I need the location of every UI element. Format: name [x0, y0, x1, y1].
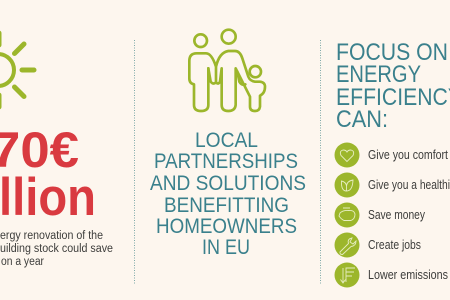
heading: local partnerships: HOMEOWNERS	[156, 215, 297, 238]
savings description: ergy renovation of the	[0, 230, 103, 242]
big unit: llion	[0, 168, 96, 227]
benefit: save money: Save money	[368, 208, 426, 222]
savings description	[0, 230, 113, 268]
heading: local partnerships: AND SOLUTIONS	[150, 172, 306, 195]
benefit: save money	[334, 202, 426, 228]
heading: focus on energy efficiency	[336, 39, 450, 133]
icon: family	[189, 30, 265, 111]
savings description: uilding stock could save	[0, 243, 113, 255]
heading: local partnerships: LOCAL	[195, 129, 258, 152]
savings description: on a year	[1, 256, 44, 268]
panel: energy efficiency benefits	[334, 39, 450, 288]
heading: focus on energy efficiency: CAN:	[336, 106, 388, 133]
benefit: create jobs	[334, 232, 421, 258]
heading: local partnerships: IN EU	[202, 236, 250, 259]
benefit: lower emissions	[334, 262, 448, 288]
benefit: create jobs: Create jobs	[368, 238, 421, 252]
heading: local partnerships	[150, 129, 306, 259]
icon: sun	[0, 33, 34, 107]
panel: local partnerships	[150, 30, 306, 259]
heading: local partnerships: PARTNERSHIPS	[154, 150, 298, 173]
panel: savings	[0, 33, 113, 268]
heading: focus on energy efficiency: ENERGY	[336, 61, 421, 88]
benefit: healthier	[334, 172, 450, 198]
benefit: comfort	[334, 142, 448, 168]
heading: local partnerships: BENEFITTING	[164, 194, 289, 217]
